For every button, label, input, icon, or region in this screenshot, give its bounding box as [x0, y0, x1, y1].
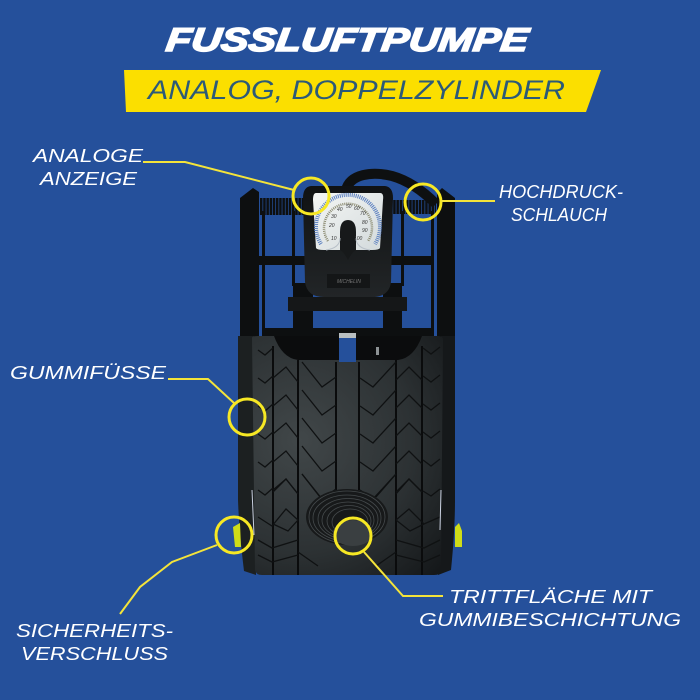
gauge face: 20	[328, 223, 335, 229]
tread plate	[252, 336, 443, 575]
gauge body	[303, 186, 393, 297]
gauge face: 30	[331, 214, 337, 220]
gauge face: 70	[360, 211, 366, 217]
callout: trittflaeche	[335, 518, 681, 630]
chevrons	[258, 347, 440, 566]
subtitle banner: ANALOG, DOPPELZYLINDER	[146, 75, 565, 105]
gauge face: 100	[354, 236, 363, 242]
frame rails	[240, 188, 455, 340]
foot pump illustration: MICHELIN	[337, 279, 361, 285]
callout: sicherheitsverschluss: VERSCHLUSS	[21, 644, 168, 664]
callout: gummifuesse: GUMMIFÜSSE	[10, 363, 167, 383]
gauge face: 80	[362, 220, 368, 226]
vertical grooves	[273, 346, 422, 575]
callout: analoge anzeige: ANZEIGE	[39, 169, 138, 189]
left spring	[260, 198, 306, 215]
callout: sicherheitsverschluss: SICHERHEITS-	[16, 621, 173, 641]
gauge face: 90	[362, 228, 368, 234]
gauge face: 50	[346, 204, 352, 210]
safety clips	[233, 523, 241, 547]
callout: hochdruckschlauch: SCHLAUCH	[511, 205, 608, 225]
gauge face: 40	[337, 207, 343, 213]
subtitle banner	[124, 70, 601, 112]
outer feet body	[238, 336, 256, 575]
brand plate	[327, 274, 370, 288]
callout: hochdruckschlauch: HOCHDRUCK-	[499, 182, 623, 202]
title: FUSSLUFTPUMPE	[164, 22, 532, 59]
callout: sicherheitsverschluss	[16, 517, 252, 664]
callout: analoge anzeige: ANALOGE	[32, 146, 144, 166]
callout: gummifuesse	[10, 363, 265, 435]
callout: trittflaeche: TRITTFLÄCHE MIT	[449, 587, 655, 607]
gauge face	[313, 193, 383, 260]
hose	[346, 174, 436, 204]
rubber dome	[306, 489, 388, 546]
right spring	[390, 200, 436, 214]
callout: hochdruckschlauch	[405, 182, 623, 225]
callout: trittflaeche: GUMMIBESCHICHTUNG	[419, 610, 681, 630]
chrome edges	[252, 490, 441, 535]
gauge face: 10	[331, 236, 337, 242]
recess	[274, 336, 422, 360]
callout: analoge anzeige	[32, 146, 329, 214]
gauge face: 60	[354, 206, 360, 212]
foot pump illustration	[233, 174, 462, 575]
centre gap	[339, 338, 356, 362]
